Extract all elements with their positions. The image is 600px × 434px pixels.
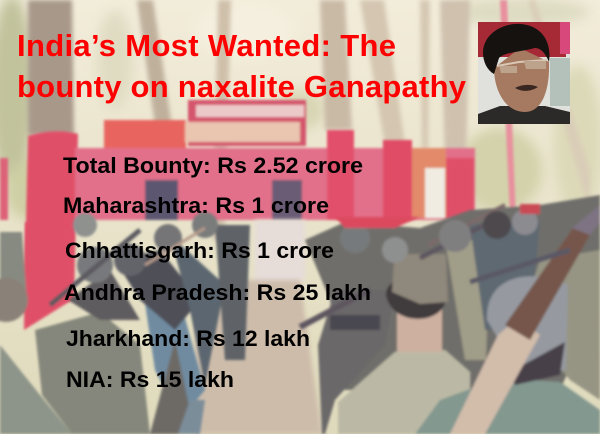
foliage: [0, 0, 600, 220]
andhra pradesh: Andhra Pradesh: Rs 25 lakh: [64, 280, 371, 305]
maharashtra: Maharashtra: Rs 1 crore: [63, 193, 329, 218]
tree trunks: [28, 0, 590, 240]
title: India’s Most Wanted: The: [17, 28, 396, 63]
photo: Ganapathy portrait: [478, 22, 570, 124]
red tree wraps and banners: [0, 0, 516, 310]
centre-right soldiers: [300, 195, 600, 434]
chhattisgarh: Chhattisgarh: Rs 1 crore: [65, 238, 334, 263]
nia: NIA: Rs 15 lakh: [66, 367, 234, 392]
left soldiers: [0, 212, 250, 434]
jharkhand: Jharkhand: Rs 12 lakh: [66, 326, 310, 351]
bounty list: [63, 153, 371, 392]
ground: [195, 220, 322, 434]
title: [17, 28, 467, 104]
troops in formation: [0, 195, 600, 434]
total bounty: Total Bounty: Rs 2.52 crore: [63, 153, 363, 178]
title: bounty on naxalite Ganapathy: [17, 69, 467, 104]
